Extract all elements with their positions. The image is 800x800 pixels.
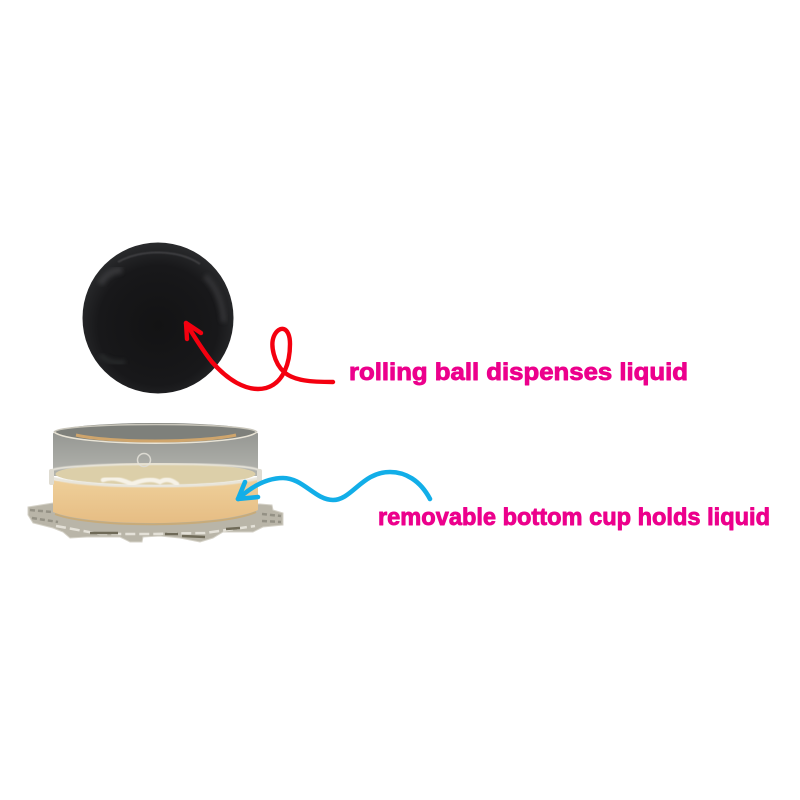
arrow: blue wavy arrow to cup <box>238 472 430 500</box>
icon: black rolling ball <box>82 242 234 394</box>
liquid surface <box>56 463 256 485</box>
clear upper wall <box>53 425 258 476</box>
arrow: red looped arrow to ball <box>186 323 333 389</box>
clear rim band <box>52 464 259 470</box>
icon: clear cup with liquid on gear base <box>28 423 283 542</box>
cup bottom edge <box>55 512 256 524</box>
gear-shaped clear base <box>28 503 283 542</box>
bubble <box>138 454 150 466</box>
foam on liquid <box>103 478 177 484</box>
liquid body <box>53 478 258 523</box>
label: rolling ball dispenses liquid: rolling ball dispenses liquid <box>349 359 688 386</box>
label: removable bottom cup holds liquid: removable bottom cup holds liquid <box>378 504 770 531</box>
